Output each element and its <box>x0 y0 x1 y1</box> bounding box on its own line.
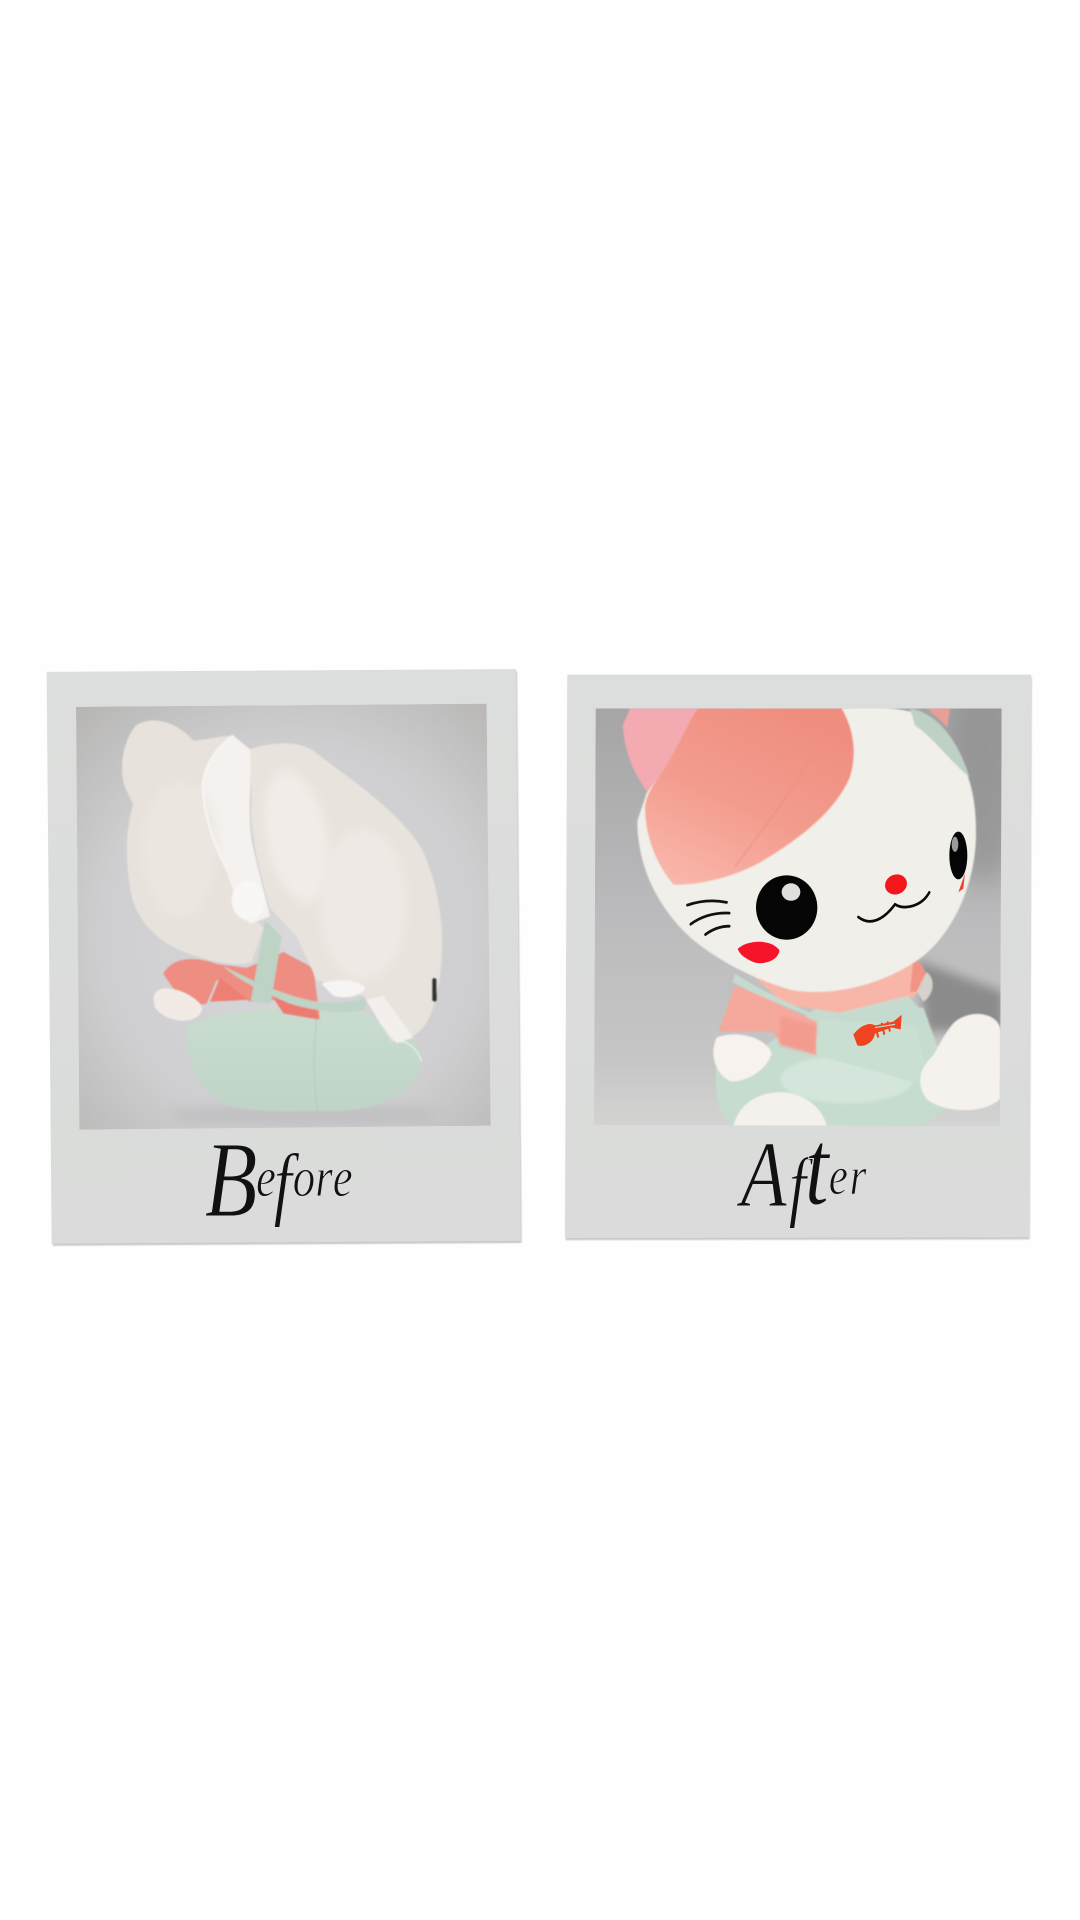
polaroid: after <box>565 675 1032 1240</box>
polaroid: before <box>47 669 522 1246</box>
label: Before: e <box>333 1146 353 1208</box>
toy body <box>153 920 422 1111</box>
face <box>687 832 967 963</box>
photo: deflated toy <box>76 704 491 1130</box>
label: After: t <box>805 1109 831 1228</box>
toy head <box>623 707 976 992</box>
label: After: A <box>736 1123 788 1227</box>
label: Before: r <box>315 1146 333 1208</box>
torn head shell <box>122 721 442 1061</box>
label: After: f <box>789 1144 814 1230</box>
label: After: r <box>850 1145 867 1206</box>
label: After: e <box>829 1145 848 1206</box>
label: Before: e <box>256 1146 276 1208</box>
photo: restored toy <box>594 708 1002 1126</box>
label: Before: B <box>205 1121 258 1240</box>
icon: fish bone <box>853 1015 902 1046</box>
infographic: before and after polaroids <box>46 669 1032 1246</box>
label: Before: o <box>293 1146 315 1208</box>
label: Before: f <box>274 1138 300 1229</box>
toy body <box>713 960 1001 1126</box>
